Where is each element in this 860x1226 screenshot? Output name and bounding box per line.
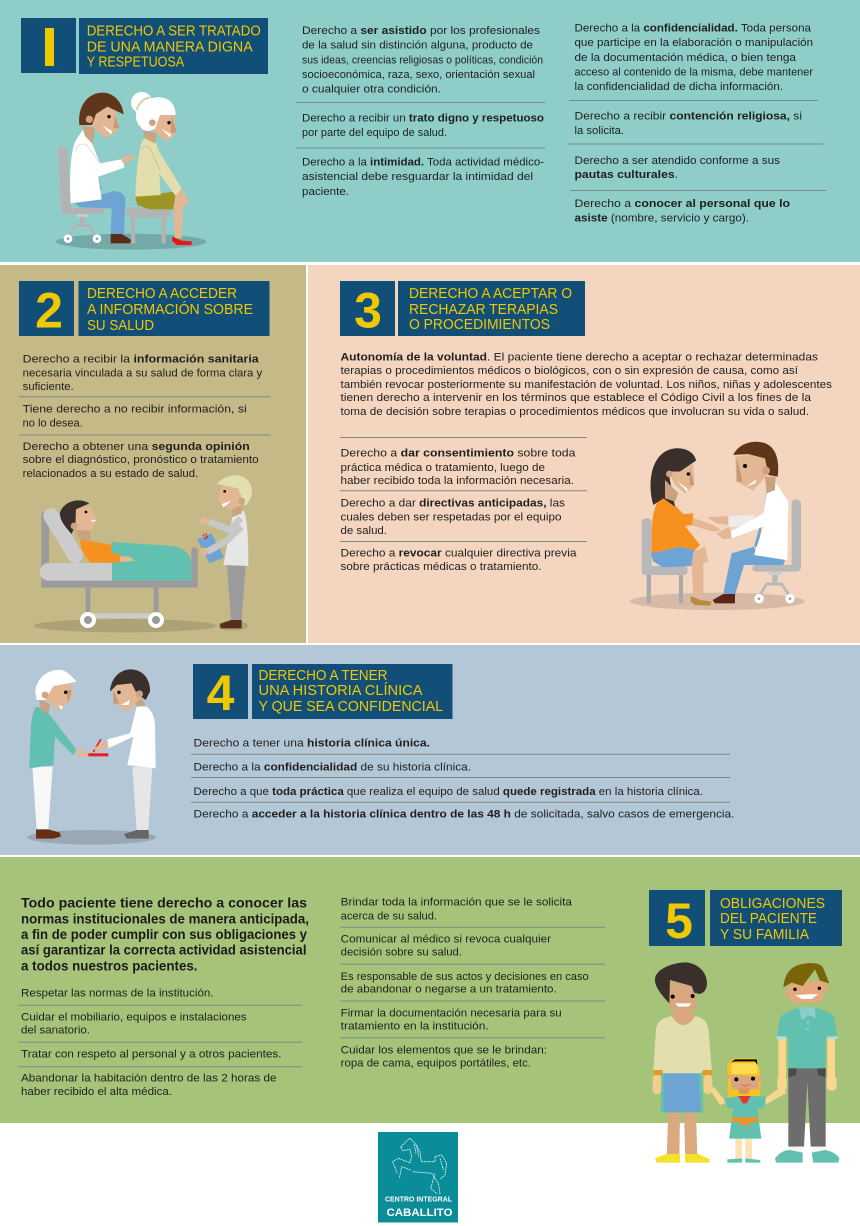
text block: rights 2: no lo desea. bbox=[23, 418, 83, 430]
text column: rights right: Derecho a recibir contención religiosa, si bbox=[574, 110, 802, 122]
number box 2: 2 bbox=[35, 282, 63, 338]
text block: autonomy paragraph: tienen derecho a intervenir en los términos que establece el Código Civil a los fines de la bbox=[340, 392, 812, 404]
panel: right 4 bbox=[0, 645, 860, 855]
number box 5 bbox=[649, 890, 705, 949]
panel: right 3 bbox=[308, 265, 860, 643]
number box 2 bbox=[19, 281, 74, 338]
text column: rights right: asiste (nombre, servicio y cargo). bbox=[574, 213, 749, 225]
text block: autonomy paragraph: terapias o procedimientos médicos o biológicos, con o sin expresión de causa, como así bbox=[340, 365, 798, 377]
panel: right 1 bbox=[0, 0, 860, 262]
text column: rights left: sus ideas, creencias religiosas o políticas, condición bbox=[302, 54, 543, 66]
illustration: two men with a clipboard bbox=[27, 669, 156, 845]
text column: rights left: o cualquier otra condición. bbox=[302, 84, 441, 96]
text block: intro: normas institucionales de manera anticipada, bbox=[21, 911, 309, 926]
text column: rights left: socioeconómica, raza, sexo, orientación sexual bbox=[302, 69, 535, 81]
text block: rights 4: Derecho a que toda práctica que realiza el equipo de salud quede registrada en la historia clínica. bbox=[194, 786, 703, 798]
heading 5: OBLIGACIONES bbox=[720, 896, 825, 912]
text block: rights 3: Derecho a revocar cualquier directiva previa bbox=[340, 548, 577, 560]
text block: rights 3: Derecho a dar directivas anticipadas, las bbox=[340, 498, 566, 510]
text column: rights left: por parte del equipo de salud. bbox=[302, 127, 447, 139]
text block: rights 2: necesaria vinculada a su salud de forma clara y bbox=[23, 368, 263, 380]
heading 2: SU SALUD bbox=[87, 318, 154, 334]
text block: obligations right bbox=[340, 897, 605, 1070]
text column: rights left: Derecho a la intimidad. Toda actividad médico- bbox=[302, 156, 544, 168]
heading 5: DEL PACIENTE bbox=[720, 911, 817, 927]
panel: obligations 5 bbox=[0, 857, 860, 1123]
text block: obligations left: Abandonar la habitación dentro de las 2 horas de bbox=[21, 1073, 276, 1085]
heading 4: Y QUE SEA CONFIDENCIAL bbox=[258, 699, 443, 715]
text block: obligations right: de abandonar o negarse a un tratamiento. bbox=[341, 984, 557, 996]
illustration: patient in bed with doctor bbox=[34, 475, 252, 632]
heading 1: DERECHO A SER TRATADO bbox=[87, 24, 261, 40]
text block: obligations right: decisión sobre su salud. bbox=[341, 947, 462, 959]
text block: rights 2: sobre el diagnóstico, pronóstico o tratamiento bbox=[23, 454, 259, 466]
heading 1: DE UNA MANERA DIGNA bbox=[87, 40, 253, 56]
number box 3 bbox=[340, 281, 395, 338]
text block: rights 3: cuales deben ser respetadas por el equipo bbox=[340, 512, 562, 524]
text block: obligations left: haber recibido el alta médica. bbox=[21, 1086, 172, 1098]
icon: rearing horse bbox=[393, 1138, 447, 1194]
number box 5: 5 bbox=[665, 893, 693, 949]
number box 4: 4 bbox=[207, 665, 235, 721]
heading 5: Y SU FAMILIA bbox=[720, 927, 809, 943]
illustration: doctor examining elderly patient bbox=[56, 92, 206, 250]
text block: autonomy paragraph: Autonomía de la voluntad . El paciente tiene derecho a aceptar o rechazar determinadas bbox=[340, 352, 819, 364]
text column: rights right: Derecho a conocer al personal que lo bbox=[574, 198, 790, 210]
text block: obligations right: acerca de su salud. bbox=[341, 910, 437, 922]
text block: obligations right: Firmar la documentación necesaria para su bbox=[341, 1008, 562, 1020]
text block: intro: Todo paciente tiene derecho a conocer las bbox=[21, 896, 307, 911]
text column: rights right: la confidencialidad de dicha información. bbox=[574, 81, 783, 93]
text block: rights 3 bbox=[340, 438, 587, 573]
text block: autonomy paragraph: también revocar posteriormente su manifestación de voluntad. Los niños, niñas y adolescentes bbox=[340, 379, 833, 391]
text column: rights right bbox=[567, 23, 826, 225]
text column: rights right: pautas culturales . bbox=[574, 169, 678, 181]
illustration: doctor holding patient's hands bbox=[630, 442, 805, 610]
text block: rights 3: de salud. bbox=[340, 525, 387, 537]
text block: rights 3: práctica médica o tratamiento, luego de bbox=[340, 462, 545, 474]
heading 4 bbox=[252, 664, 452, 719]
text block: intro: a fin de poder cumplir con sus obligaciones y bbox=[21, 927, 307, 942]
text block: rights 2 bbox=[19, 354, 270, 480]
text block: rights 4: Derecho a tener una historia clínica única. bbox=[194, 738, 430, 750]
text block: intro bbox=[21, 896, 309, 974]
number box 4 bbox=[193, 664, 248, 721]
text block: obligations right: Brindar toda la información que se le solicita bbox=[341, 897, 573, 909]
heading 5 bbox=[710, 890, 842, 946]
heading 3: DERECHO A ACEPTAR O bbox=[409, 286, 572, 302]
text block: obligations right: tratamiento en la institución. bbox=[341, 1021, 489, 1033]
text block: obligations left: Respetar las normas de la institución. bbox=[21, 988, 214, 1000]
heading 2: A INFORMACIÓN SOBRE bbox=[87, 301, 253, 318]
text block: rights 3: Derecho a dar consentimiento sobre toda bbox=[340, 448, 576, 460]
text column: rights left: de la salud sin distinción alguna, producto de bbox=[302, 40, 533, 52]
text column: rights right: acceso al contenido de la misma, debe mantener bbox=[574, 67, 813, 79]
text block: obligations left: Tratar con respeto al personal y a otros pacientes. bbox=[21, 1049, 282, 1061]
text block: obligations right: ropa de cama, equipos portátiles, etc. bbox=[341, 1058, 531, 1070]
heading 3 bbox=[398, 281, 585, 336]
text block: obligations left: del sanatorio. bbox=[21, 1025, 90, 1037]
logo: Centro Integral Caballito: CENTRO INTEGRAL bbox=[385, 1195, 452, 1204]
heading 1 bbox=[79, 18, 268, 74]
text block: intro: a todos nuestros pacientes. bbox=[21, 959, 198, 974]
text block: obligations right: Cuidar los elementos que se le brindan: bbox=[341, 1044, 547, 1056]
text block: rights 4 bbox=[191, 738, 734, 820]
text column: rights right: Derecho a la confidencialidad. Toda persona bbox=[574, 23, 812, 35]
text column: rights right: Derecho a ser atendido conforme a sus bbox=[574, 155, 781, 167]
heading 4: DERECHO A TENER bbox=[258, 668, 388, 684]
number box 3: 3 bbox=[354, 282, 382, 338]
heading 4: UNA HISTORIA CLÍNICA bbox=[258, 682, 423, 699]
heading 3: O PROCEDIMIENTOS bbox=[409, 317, 550, 333]
text column: rights left: Derecho a ser asistido por los profesionales bbox=[302, 25, 541, 37]
text block: rights 2: relacionados a su estado de salud. bbox=[23, 468, 198, 480]
text block: intro: así garantizar la correcta actividad asistencial bbox=[21, 942, 306, 957]
text column: rights left: Derecho a recibir un trato digno y respetuoso bbox=[302, 113, 544, 125]
text block: rights 2: Derecho a recibir la información sanitaria bbox=[23, 354, 260, 366]
text block: rights 2: suficiente. bbox=[23, 381, 74, 393]
text column: rights left: asistencial debe resguardar la intimidad del bbox=[302, 171, 533, 183]
text column: rights right: que participe en la elaboración o manipulación bbox=[574, 37, 813, 49]
text block: rights 4: Derecho a la confidencialidad de su historia clínica. bbox=[194, 762, 471, 774]
text block: rights 2: Tiene derecho a no recibir información, si bbox=[23, 404, 247, 416]
heading 2 bbox=[78, 281, 270, 336]
text block: autonomy paragraph bbox=[340, 352, 833, 418]
text column: rights left: paciente. bbox=[302, 186, 349, 198]
heading 2: DERECHO A ACCEDER bbox=[87, 286, 237, 302]
panel: right 2 bbox=[0, 265, 306, 643]
heading 3: RECHAZAR TERAPIAS bbox=[409, 302, 558, 318]
logo: Centro Integral Caballito: CABALLITO bbox=[386, 1207, 453, 1219]
text column: rights left bbox=[296, 25, 545, 198]
text block: rights 3: haber recibido toda la información necesaria. bbox=[340, 475, 574, 487]
heading 1: Y RESPETUOSA bbox=[87, 55, 184, 71]
text column: rights right: la solicita. bbox=[574, 125, 624, 137]
text block: rights 2: Derecho a obtener una segunda opinión bbox=[23, 441, 250, 453]
text block: rights 4: Derecho a acceder a la historia clínica dentro de las 48 h de solicitada, salvo casos de emergencia. bbox=[194, 808, 734, 820]
text block: obligations left: Cuidar el mobiliario, equipos e instalaciones bbox=[21, 1012, 247, 1024]
text block: obligations right: Comunicar al médico si revoca cualquier bbox=[341, 934, 551, 946]
illustration: family bbox=[653, 962, 839, 1163]
logo: Centro Integral Caballito bbox=[378, 1132, 458, 1222]
text block: rights 3: sobre prácticas médicas o tratamiento. bbox=[340, 561, 542, 573]
text block: autonomy paragraph: toma de decisión sobre terapias o procedimientos médicos que involucran su vida o salud. bbox=[340, 406, 809, 418]
text block: obligations right: Es responsable de sus actos y decisiones en caso bbox=[341, 971, 589, 983]
number box 1 bbox=[21, 18, 76, 73]
text column: rights right: de la documentación médica, o bien tenga bbox=[574, 52, 797, 64]
text block: obligations left bbox=[19, 988, 302, 1098]
